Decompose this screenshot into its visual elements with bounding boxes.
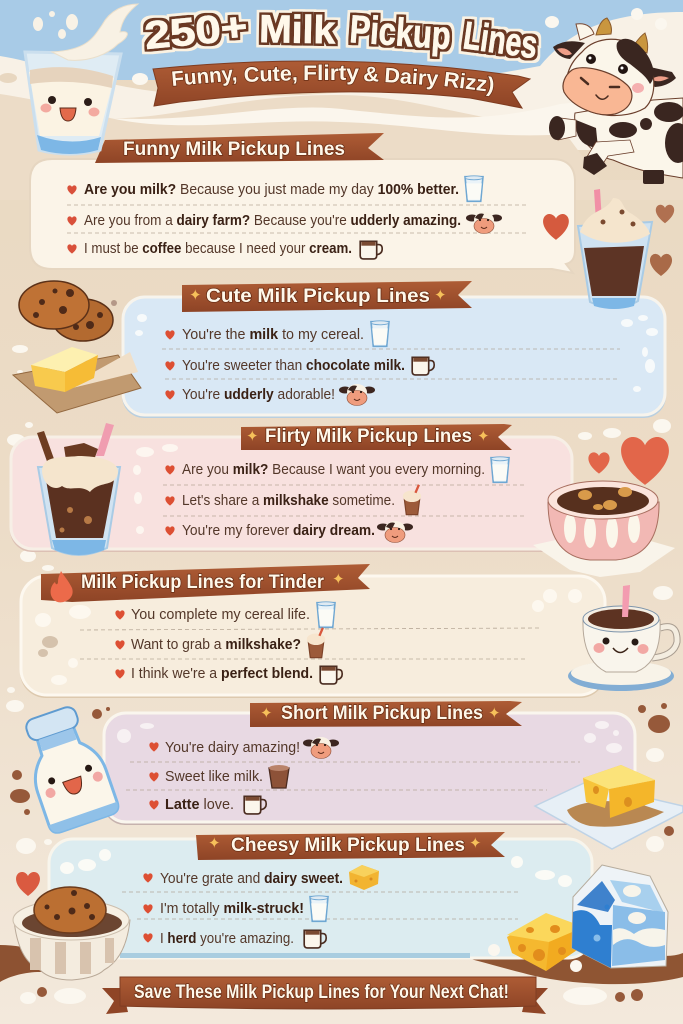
heading ribbon: cute: ✦	[434, 287, 447, 304]
horns and ears	[596, 18, 612, 35]
subtitle text: Cute,	[243, 62, 298, 87]
heading ribbon: flirty: Flirty Milk Pickup Lines	[265, 426, 472, 447]
bullet hearts	[165, 465, 175, 536]
illustration: chocolate frappe	[578, 189, 652, 309]
line 2: I'm totally milk-struck!	[160, 900, 304, 917]
icon: milk glass	[310, 896, 328, 921]
illustration: cookie in bowl	[13, 872, 130, 980]
chocolate smudges on panel	[38, 636, 58, 657]
line 1: You're grate and dairy sweet.	[160, 870, 343, 887]
subtitle text: Dairy	[384, 64, 439, 91]
title: Pickup	[348, 8, 452, 58]
line 1: You complete my cereal life.	[131, 606, 310, 623]
icon: mug	[304, 930, 326, 948]
illustration: cheese on plate	[535, 765, 683, 849]
bullet hearts	[165, 330, 175, 400]
ribbon shape	[153, 61, 530, 108]
bullet hearts	[149, 742, 159, 810]
line 1: Are you milk? Because you just made my day 100% better.	[84, 181, 459, 198]
heading ribbon: tinder: Milk Pickup Lines for Tinder	[81, 572, 325, 593]
line 2: You're sweeter than chocolate milk.	[182, 357, 405, 374]
line 3: You're udderly adorable!	[182, 386, 335, 403]
line 1: You're dairy amazing!	[165, 739, 300, 756]
icon: chocolate mug	[412, 357, 434, 375]
decorative panel drops	[60, 849, 572, 887]
icon: mug	[244, 796, 266, 814]
decorative panel drops	[117, 721, 622, 753]
legs	[558, 118, 576, 140]
heading ribbon: cheesy: ✦	[469, 835, 482, 852]
illustration: cheese cube	[488, 913, 584, 972]
panel: short milk pickup lines	[103, 713, 636, 825]
panel background	[11, 437, 572, 549]
line 2: Want to grab a milkshake?	[131, 636, 301, 653]
panel background	[104, 713, 635, 822]
panel: cute milk pickup lines	[122, 297, 666, 418]
footer ribbon: Save These Milk Pickup Lines for Your Next Chat!	[134, 982, 509, 1003]
heading ribbon: cute: Cute Milk Pickup Lines	[206, 286, 430, 307]
heading ribbon: flirty	[241, 424, 512, 450]
decorative chocolate drops	[10, 300, 674, 1002]
decorative panel drops	[35, 589, 582, 685]
illustration: milk carton	[572, 865, 668, 968]
title: Lines	[461, 14, 540, 67]
icon: cow	[377, 521, 413, 542]
panel background	[21, 576, 605, 695]
icon: cheese	[349, 865, 379, 890]
icon: coffee mug	[360, 241, 382, 259]
heading ribbon: cute	[182, 281, 472, 312]
illustration: cereal bowl	[533, 481, 675, 577]
hearts near flirty panel	[588, 437, 669, 485]
heading ribbon: cute: ✦	[189, 287, 202, 304]
heading ribbon: cheesy: Cheesy Milk Pickup Lines	[231, 835, 465, 856]
panel: flirty milk pickup lines	[10, 437, 573, 552]
line 1: You're the milk to my cereal.	[182, 326, 364, 343]
panel shadow	[20, 579, 606, 698]
heading ribbon: flirty: ✦	[246, 428, 259, 445]
icon: cow	[466, 212, 502, 234]
line 2: Sweet like milk.	[165, 768, 263, 785]
panel: cheesy milk pickup lines	[49, 839, 592, 958]
panel background	[123, 297, 665, 415]
illustration: milk bottle	[14, 702, 120, 835]
panel background	[49, 839, 592, 958]
panel: tinder milk pickup lines	[20, 576, 606, 698]
subtitle text	[170, 62, 496, 97]
head	[567, 39, 654, 116]
heading ribbon: flirty: ✦	[477, 428, 490, 445]
line 3: I think we're a perfect blend.	[131, 665, 313, 682]
icon: milkshake	[307, 628, 325, 658]
line 1: Are you milk? Because I want you every morning.	[182, 461, 485, 478]
heading ribbon: short: ✦	[260, 705, 273, 722]
line 3: I herd you're amazing.	[160, 930, 294, 947]
subtitle text: &	[363, 63, 380, 87]
line 3: I must be coffee because I need your cream.	[84, 240, 352, 257]
subtitle text: Rizz)	[442, 68, 496, 97]
illustration: cookies	[19, 281, 113, 341]
heading ribbon: tinder: ✦	[332, 571, 345, 588]
title: Milk	[259, 8, 336, 52]
bullet hearts	[115, 610, 125, 679]
illustration: cartoon cow	[549, 18, 683, 184]
icon: milk glass	[491, 457, 509, 482]
cow body	[575, 98, 683, 178]
panel shadow	[10, 440, 573, 552]
decorative panel drops	[135, 314, 658, 392]
icon: tinder flame	[51, 571, 73, 602]
line 3: You're my forever dairy dream.	[182, 522, 375, 539]
bullet hearts	[67, 185, 77, 254]
bullet hearts	[143, 873, 153, 943]
subtitle text: Flirty	[303, 62, 359, 85]
panel: funny milk pickup lines	[30, 159, 575, 273]
line 2: Let's share a milkshake sometime.	[182, 492, 395, 509]
icon: milk glass	[317, 602, 335, 627]
icon: milk glass	[465, 176, 483, 201]
subtitle ribbon	[153, 61, 530, 108]
heading ribbon: cheesy: ✦	[208, 835, 221, 852]
icon: milk glass	[371, 321, 389, 346]
illustration: milk glass with splash	[0, 4, 148, 154]
heading ribbon: short: ✦	[488, 705, 501, 722]
illustration: smiling coffee cup	[568, 585, 677, 691]
icon: cow	[303, 737, 339, 758]
heading ribbon: short	[250, 701, 522, 727]
heading ribbon: funny: Funny Milk Pickup Lines	[123, 139, 345, 160]
icon: mug	[320, 666, 342, 684]
icon: chocolate cup	[269, 765, 289, 788]
hearts near funny panel	[543, 205, 674, 276]
icon: milkshake	[403, 485, 421, 515]
line 2: Are you from a dairy farm? Because you're udderly amazing.	[84, 212, 461, 229]
heading ribbon: short: Short Milk Pickup Lines	[281, 703, 483, 724]
icon: cow	[339, 384, 375, 406]
panel shadow	[122, 300, 666, 418]
title: 250+	[143, 5, 249, 58]
panel background	[30, 159, 575, 273]
heading ribbon: tinder	[41, 564, 370, 602]
footer ribbon	[102, 977, 548, 1014]
title	[143, 5, 540, 67]
snout	[563, 68, 632, 115]
line 3: Latte love.	[165, 796, 234, 813]
illustration: butter on board	[13, 347, 141, 413]
illustration: loaded milkshake	[37, 423, 120, 555]
heading ribbon: funny	[95, 133, 384, 163]
panel shadow	[103, 716, 636, 825]
heading ribbon: cheesy	[196, 832, 505, 860]
subtitle text: Funny,	[170, 62, 238, 91]
decorative panel drops	[133, 444, 178, 534]
